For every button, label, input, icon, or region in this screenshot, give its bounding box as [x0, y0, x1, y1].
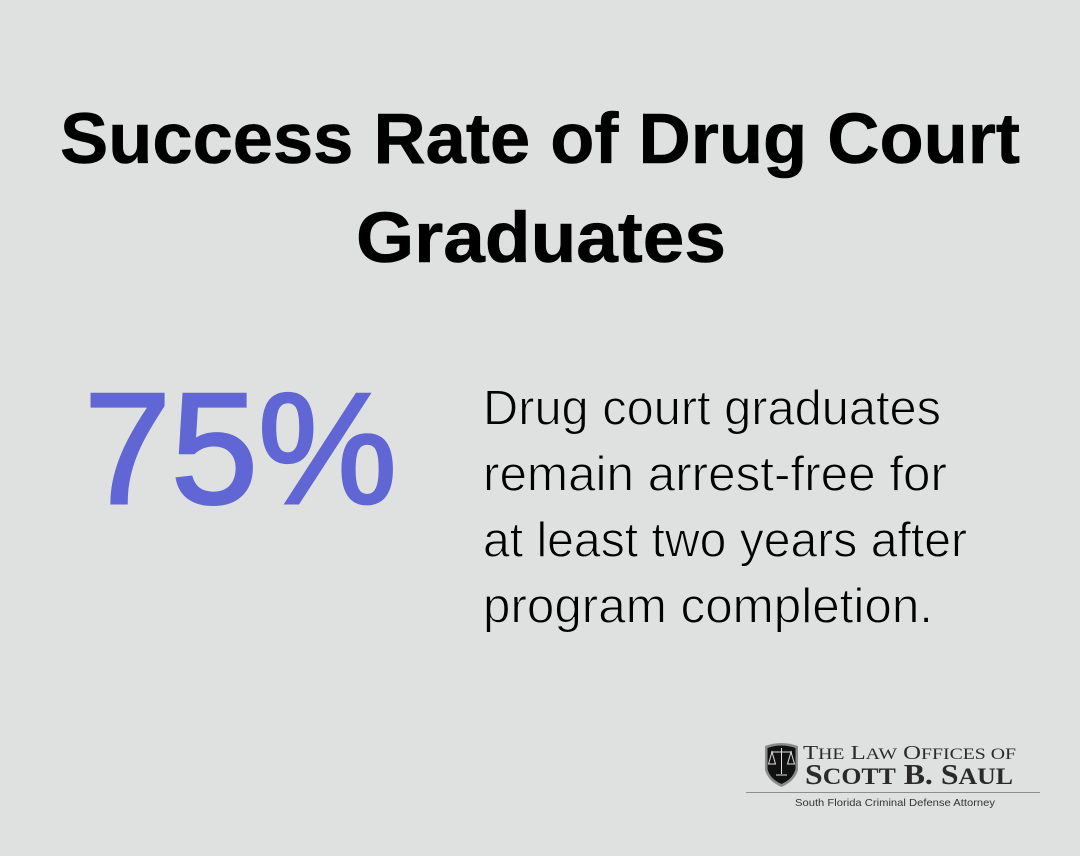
firm name: THE L AW O FFICES OF: [803, 742, 1016, 764]
title: Success Rate of Drug Court: [60, 100, 1020, 179]
firm name: [803, 742, 1016, 791]
description text: program completion.: [483, 580, 933, 634]
description text: at least two years after: [483, 514, 967, 568]
logo tagline: South Florida Criminal Defense Attorney: [795, 797, 996, 809]
title: Graduates: [356, 199, 726, 278]
description text: [483, 382, 967, 634]
title: [60, 100, 1020, 278]
firm name: SCOTT B. SAUL: [805, 759, 1013, 791]
description text: Drug court graduates: [483, 382, 941, 436]
big statistic: 75%: 75%: [84, 361, 397, 537]
law office logo: [746, 742, 1040, 809]
description text: remain arrest-free for: [483, 448, 947, 502]
icon: shield with scales: [765, 743, 798, 787]
